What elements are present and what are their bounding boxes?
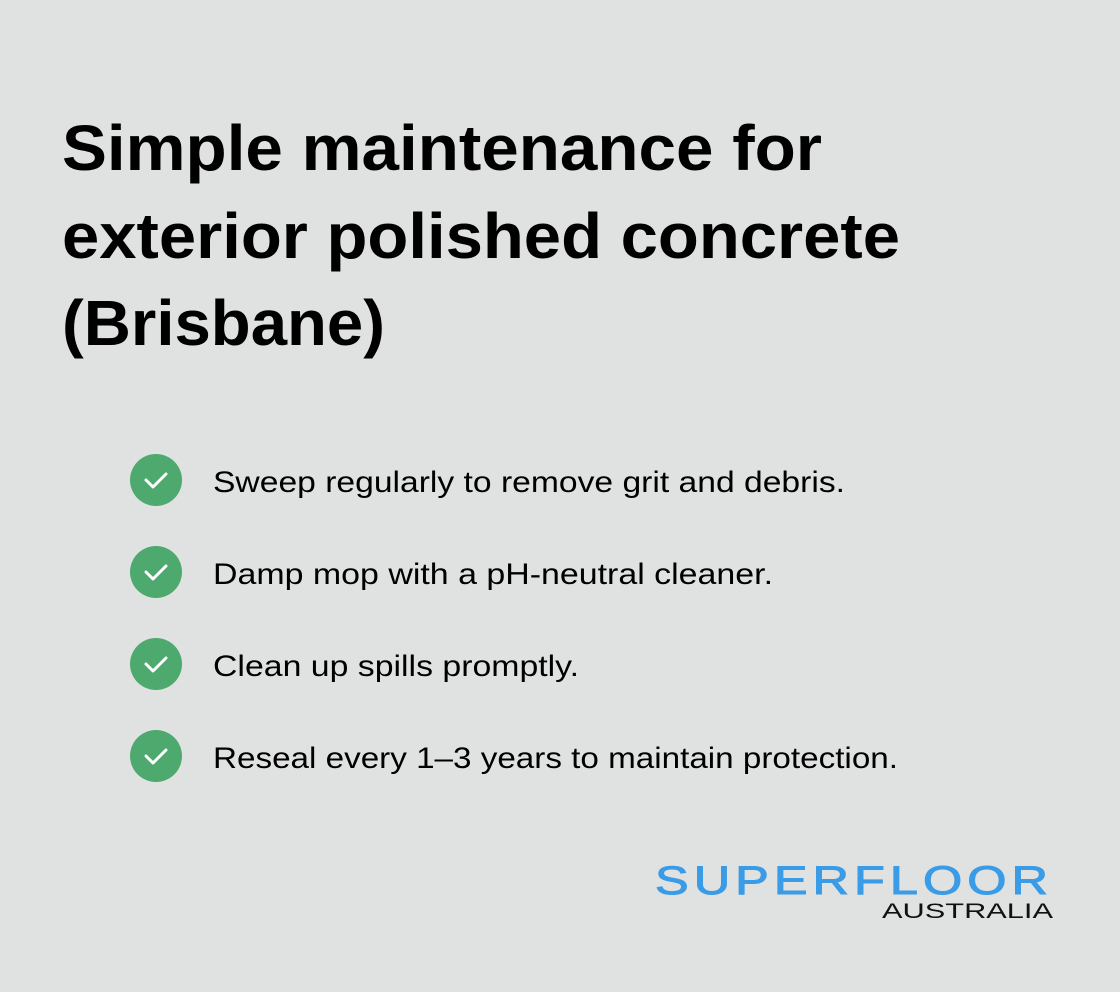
logo: AUSTRALIA (882, 900, 1053, 923)
item: mop: Damp mop with a pH-neutral cleaner. (213, 558, 773, 591)
item: reseal: Reseal every 1–3 years to maintain protection. (213, 742, 898, 775)
title: Simple maintenance for (62, 112, 822, 184)
logo (655, 859, 1053, 923)
item: spills (130, 638, 579, 690)
item: sweep: Sweep regularly to remove grit and debris. (213, 466, 845, 499)
item: spills: Clean up spills promptly. (213, 650, 579, 683)
checklist (130, 454, 898, 782)
title: exterior polished concrete (62, 200, 900, 272)
logo: SUPERFLOOR (655, 859, 1053, 903)
title: (Brisbane) (62, 287, 385, 359)
title (62, 112, 900, 359)
item: reseal (130, 730, 898, 782)
item: sweep (130, 454, 845, 506)
item: mop (130, 546, 773, 598)
